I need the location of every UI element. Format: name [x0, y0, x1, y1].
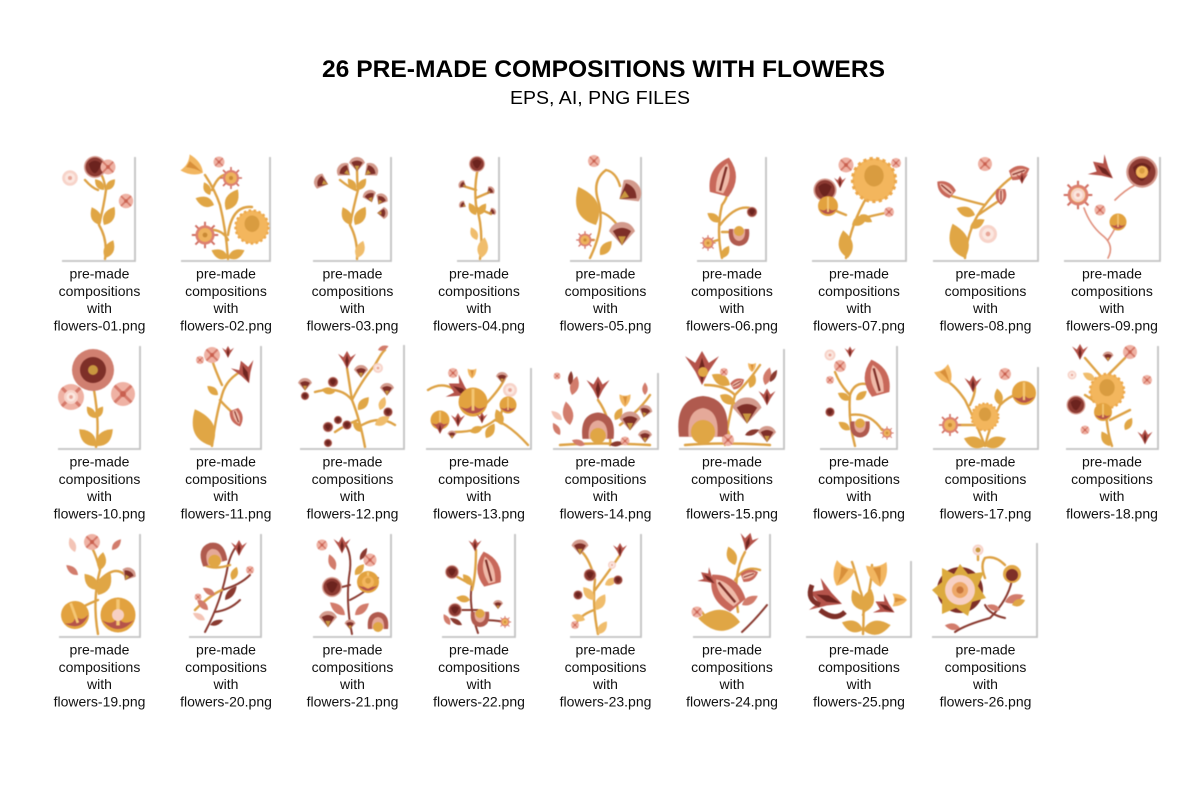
filename caption 07: with	[846, 300, 871, 316]
filename caption 09: flowers-09.png	[1066, 318, 1158, 334]
flower art 11	[186, 346, 260, 450]
filename caption 03: pre-made	[323, 266, 383, 282]
filename caption 12: compositions	[312, 471, 393, 487]
thumbnail 22	[433, 534, 525, 710]
filename caption 26: pre-made	[956, 642, 1016, 658]
flower art 01	[62, 156, 133, 260]
filename caption 22: pre-made	[449, 642, 509, 658]
title: 26 PRE-MADE COMPOSITIONS WITH FLOWERS	[322, 56, 885, 83]
filename caption 19: with	[86, 676, 112, 692]
thumbnail 20	[180, 534, 272, 710]
filename caption 09: pre-made	[1082, 266, 1142, 282]
thumbnail 10	[54, 346, 145, 522]
filename caption 25: pre-made	[829, 642, 889, 658]
filename caption 16: with	[846, 488, 871, 504]
flower art 23	[571, 540, 627, 636]
flower art 08	[933, 157, 1032, 261]
flower art 22	[441, 538, 511, 633]
thumbnail 16	[813, 346, 905, 522]
flower art 15	[678, 351, 779, 446]
filename caption 21: pre-made	[323, 642, 383, 658]
thumbnail 05	[560, 155, 651, 334]
filename caption 20: flowers-20.png	[180, 694, 272, 710]
filename caption 22: compositions	[438, 659, 520, 675]
filename caption 13: with	[466, 488, 491, 504]
filename caption 01: pre-made	[70, 266, 130, 282]
filename caption 26: compositions	[945, 659, 1026, 675]
filename caption 16: pre-made	[829, 454, 889, 470]
filename caption 17: flowers-17.png	[940, 506, 1031, 522]
filename caption 10: flowers-10.png	[54, 506, 145, 522]
filename caption 24: with	[719, 676, 744, 692]
filename caption 01: compositions	[59, 283, 140, 299]
filename caption 02: pre-made	[196, 266, 256, 282]
filename caption 07: flowers-07.png	[813, 318, 905, 334]
filename caption 01: flowers-01.png	[54, 318, 145, 334]
filename caption 15: flowers-15.png	[686, 506, 778, 522]
filename caption 08: flowers-08.png	[940, 318, 1031, 334]
filename caption 20: compositions	[185, 659, 267, 675]
filename caption 26: flowers-26.png	[940, 694, 1031, 710]
filename caption 13: pre-made	[449, 454, 509, 470]
filename caption 24: pre-made	[702, 642, 762, 658]
filename caption 04: compositions	[438, 283, 520, 299]
thumbnail 04	[433, 156, 525, 334]
filename caption 09: with	[1099, 300, 1124, 316]
filename caption 10: pre-made	[70, 454, 130, 470]
flower art 13	[428, 368, 528, 445]
filename caption 25: with	[846, 676, 871, 692]
filename caption 17: with	[972, 488, 998, 504]
filename caption 02: flowers-02.png	[180, 318, 272, 334]
filename caption 13: compositions	[438, 471, 520, 487]
filename caption 11: with	[213, 488, 238, 504]
thumbnail 26	[932, 543, 1037, 710]
filename caption 12: pre-made	[323, 454, 383, 470]
flower art 25	[804, 560, 907, 637]
filename caption 18: compositions	[1071, 471, 1153, 487]
filename caption 03: flowers-03.png	[307, 318, 398, 334]
filename caption 21: compositions	[312, 659, 393, 675]
filename caption 25: flowers-25.png	[813, 694, 905, 710]
filename caption 05: flowers-05.png	[560, 318, 651, 334]
filename caption 17: compositions	[945, 471, 1026, 487]
flower art 06	[700, 154, 757, 260]
filename caption 21: with	[339, 676, 365, 692]
flower art 04	[457, 156, 497, 259]
filename caption 11: flowers-11.png	[181, 506, 271, 522]
flower art 10	[58, 349, 135, 450]
thumbnail 24	[686, 530, 778, 710]
filename caption 10: compositions	[59, 471, 140, 487]
thumbnail 18	[1066, 344, 1158, 522]
filename caption 14: flowers-14.png	[560, 506, 651, 522]
flower art 14	[549, 371, 654, 448]
filename caption 12: with	[339, 488, 365, 504]
flower art 17	[934, 364, 1036, 451]
thumbnail 11	[181, 346, 271, 522]
thumbnail 21	[307, 534, 398, 710]
flower art 02	[180, 154, 268, 262]
thumbnail 19	[54, 534, 145, 710]
subtitle: EPS, AI, PNG FILES	[510, 87, 690, 108]
flower art 18	[1067, 344, 1152, 448]
filename caption 12: flowers-12.png	[307, 506, 398, 522]
filename caption 06: flowers-06.png	[686, 318, 778, 334]
flower art 26	[932, 544, 1026, 632]
filename caption 08: pre-made	[956, 266, 1016, 282]
thumbnail 09	[1064, 152, 1160, 334]
thumbnail 14	[549, 371, 658, 522]
filename caption 04: flowers-04.png	[433, 318, 525, 334]
flower art 21	[316, 536, 388, 634]
filename caption 06: compositions	[691, 283, 773, 299]
filename caption 08: with	[972, 300, 998, 316]
filename caption 23: compositions	[565, 659, 646, 675]
filename caption 04: with	[466, 300, 491, 316]
filename caption 21: flowers-21.png	[307, 694, 398, 710]
filename caption 06: pre-made	[702, 266, 762, 282]
filename caption 22: flowers-22.png	[433, 694, 525, 710]
thumbnail 13	[426, 368, 531, 522]
filename caption 19: flowers-19.png	[54, 694, 145, 710]
thumbnail 01	[54, 156, 145, 334]
filename caption 01: with	[86, 300, 112, 316]
filename caption 11: compositions	[185, 471, 267, 487]
filename caption 08: compositions	[945, 283, 1026, 299]
filename caption 24: compositions	[691, 659, 773, 675]
thumbnail 25	[804, 560, 911, 710]
filename caption 23: flowers-23.png	[560, 694, 651, 710]
filename caption 14: with	[592, 488, 618, 504]
filename caption 10: with	[86, 488, 112, 504]
filename caption 04: pre-made	[449, 266, 509, 282]
flower art 09	[1064, 152, 1158, 258]
filename caption 23: with	[592, 676, 618, 692]
filename caption 19: pre-made	[70, 642, 130, 658]
thumbnail 03	[307, 157, 398, 334]
filename caption 09: compositions	[1071, 283, 1153, 299]
flower art 20	[191, 540, 254, 632]
filename caption 05: with	[592, 300, 618, 316]
filename caption 03: with	[339, 300, 365, 316]
filename caption 19: compositions	[59, 659, 140, 675]
filename caption 24: flowers-24.png	[686, 694, 778, 710]
filename caption 23: pre-made	[576, 642, 636, 658]
thumbnail 07	[812, 157, 906, 334]
filename caption 06: with	[719, 300, 744, 316]
filename caption 18: flowers-18.png	[1066, 506, 1158, 522]
filename caption 15: compositions	[691, 471, 773, 487]
filename caption 20: pre-made	[196, 642, 256, 658]
flower art 07	[813, 158, 901, 259]
flower art 19	[57, 534, 138, 634]
filename caption 02: compositions	[185, 283, 267, 299]
filename caption 13: flowers-13.png	[433, 506, 525, 522]
filename caption 03: compositions	[312, 283, 393, 299]
filename caption 18: with	[1099, 488, 1124, 504]
filename caption 20: with	[213, 676, 238, 692]
thumbnail 15	[678, 349, 784, 522]
flower art 03	[312, 157, 390, 260]
filename caption 15: pre-made	[702, 454, 762, 470]
filename caption 25: compositions	[818, 659, 900, 675]
filename caption 22: with	[466, 676, 491, 692]
thumbnail 02	[180, 154, 272, 334]
filename caption 14: pre-made	[576, 454, 636, 470]
thumbnail 17	[933, 364, 1038, 522]
filename caption 05: pre-made	[576, 266, 636, 282]
filename caption 15: with	[719, 488, 744, 504]
thumbnail 12	[298, 344, 404, 522]
flower art 05	[569, 155, 646, 258]
thumbnail 23	[560, 534, 651, 710]
flower art 16	[824, 346, 894, 446]
filename caption 16: compositions	[818, 471, 900, 487]
thumbnail 06	[686, 154, 778, 334]
filename caption 17: pre-made	[956, 454, 1016, 470]
filename caption 14: compositions	[565, 471, 646, 487]
filename caption 11: pre-made	[196, 454, 256, 470]
flower art 24	[692, 530, 767, 632]
thumbnail 08	[933, 157, 1038, 334]
filename caption 05: compositions	[565, 283, 646, 299]
filename caption 07: pre-made	[829, 266, 889, 282]
filename caption 16: flowers-16.png	[813, 506, 905, 522]
filename caption 07: compositions	[818, 283, 900, 299]
flower art 12	[298, 344, 395, 447]
filename caption 02: with	[213, 300, 238, 316]
filename caption 26: with	[972, 676, 998, 692]
filename caption 18: pre-made	[1082, 454, 1142, 470]
